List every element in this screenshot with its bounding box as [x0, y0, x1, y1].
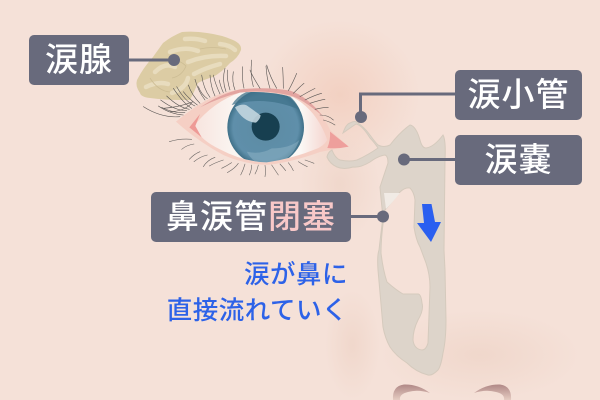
leader dots	[168, 54, 410, 222]
icon: lacrimal gland	[136, 32, 241, 100]
label: lacrimal gland	[29, 35, 129, 85]
sclera	[194, 92, 327, 162]
eyelid	[176, 88, 349, 165]
lower lashes	[169, 139, 314, 177]
label: lacrimal canaliculus: 涙小管	[468, 76, 570, 113]
tear line	[189, 114, 202, 137]
skin shading	[260, 20, 580, 400]
note: tears flow directly to the nose	[167, 260, 348, 325]
pupil	[252, 113, 280, 141]
label: nasolacrimal duct obstruction	[151, 192, 351, 242]
label: lacrimal sac: 涙嚢	[484, 141, 552, 178]
inner corner	[327, 132, 349, 148]
lacrimal duct system	[327, 122, 446, 375]
arrow: tear flow	[417, 204, 441, 242]
leader lines	[125, 60, 460, 216]
nostrils	[393, 384, 511, 400]
note: tears flow directly to the nose: 涙が鼻に	[244, 261, 348, 289]
label: lacrimal canaliculus	[455, 70, 582, 120]
upper lashes	[143, 60, 335, 125]
icon: eye	[143, 60, 349, 177]
label: lacrimal gland: 涙腺	[45, 41, 113, 78]
highlight	[235, 105, 261, 123]
facial illustration	[129, 32, 516, 400]
label: nasolacrimal duct obstruction: 鼻涙管閉塞	[166, 198, 336, 235]
blocked duct wedge	[384, 193, 400, 209]
note: tears flow directly to the nose: 直接流れていく	[167, 297, 348, 325]
label: lacrimal sac	[455, 135, 582, 185]
iris	[227, 88, 304, 166]
